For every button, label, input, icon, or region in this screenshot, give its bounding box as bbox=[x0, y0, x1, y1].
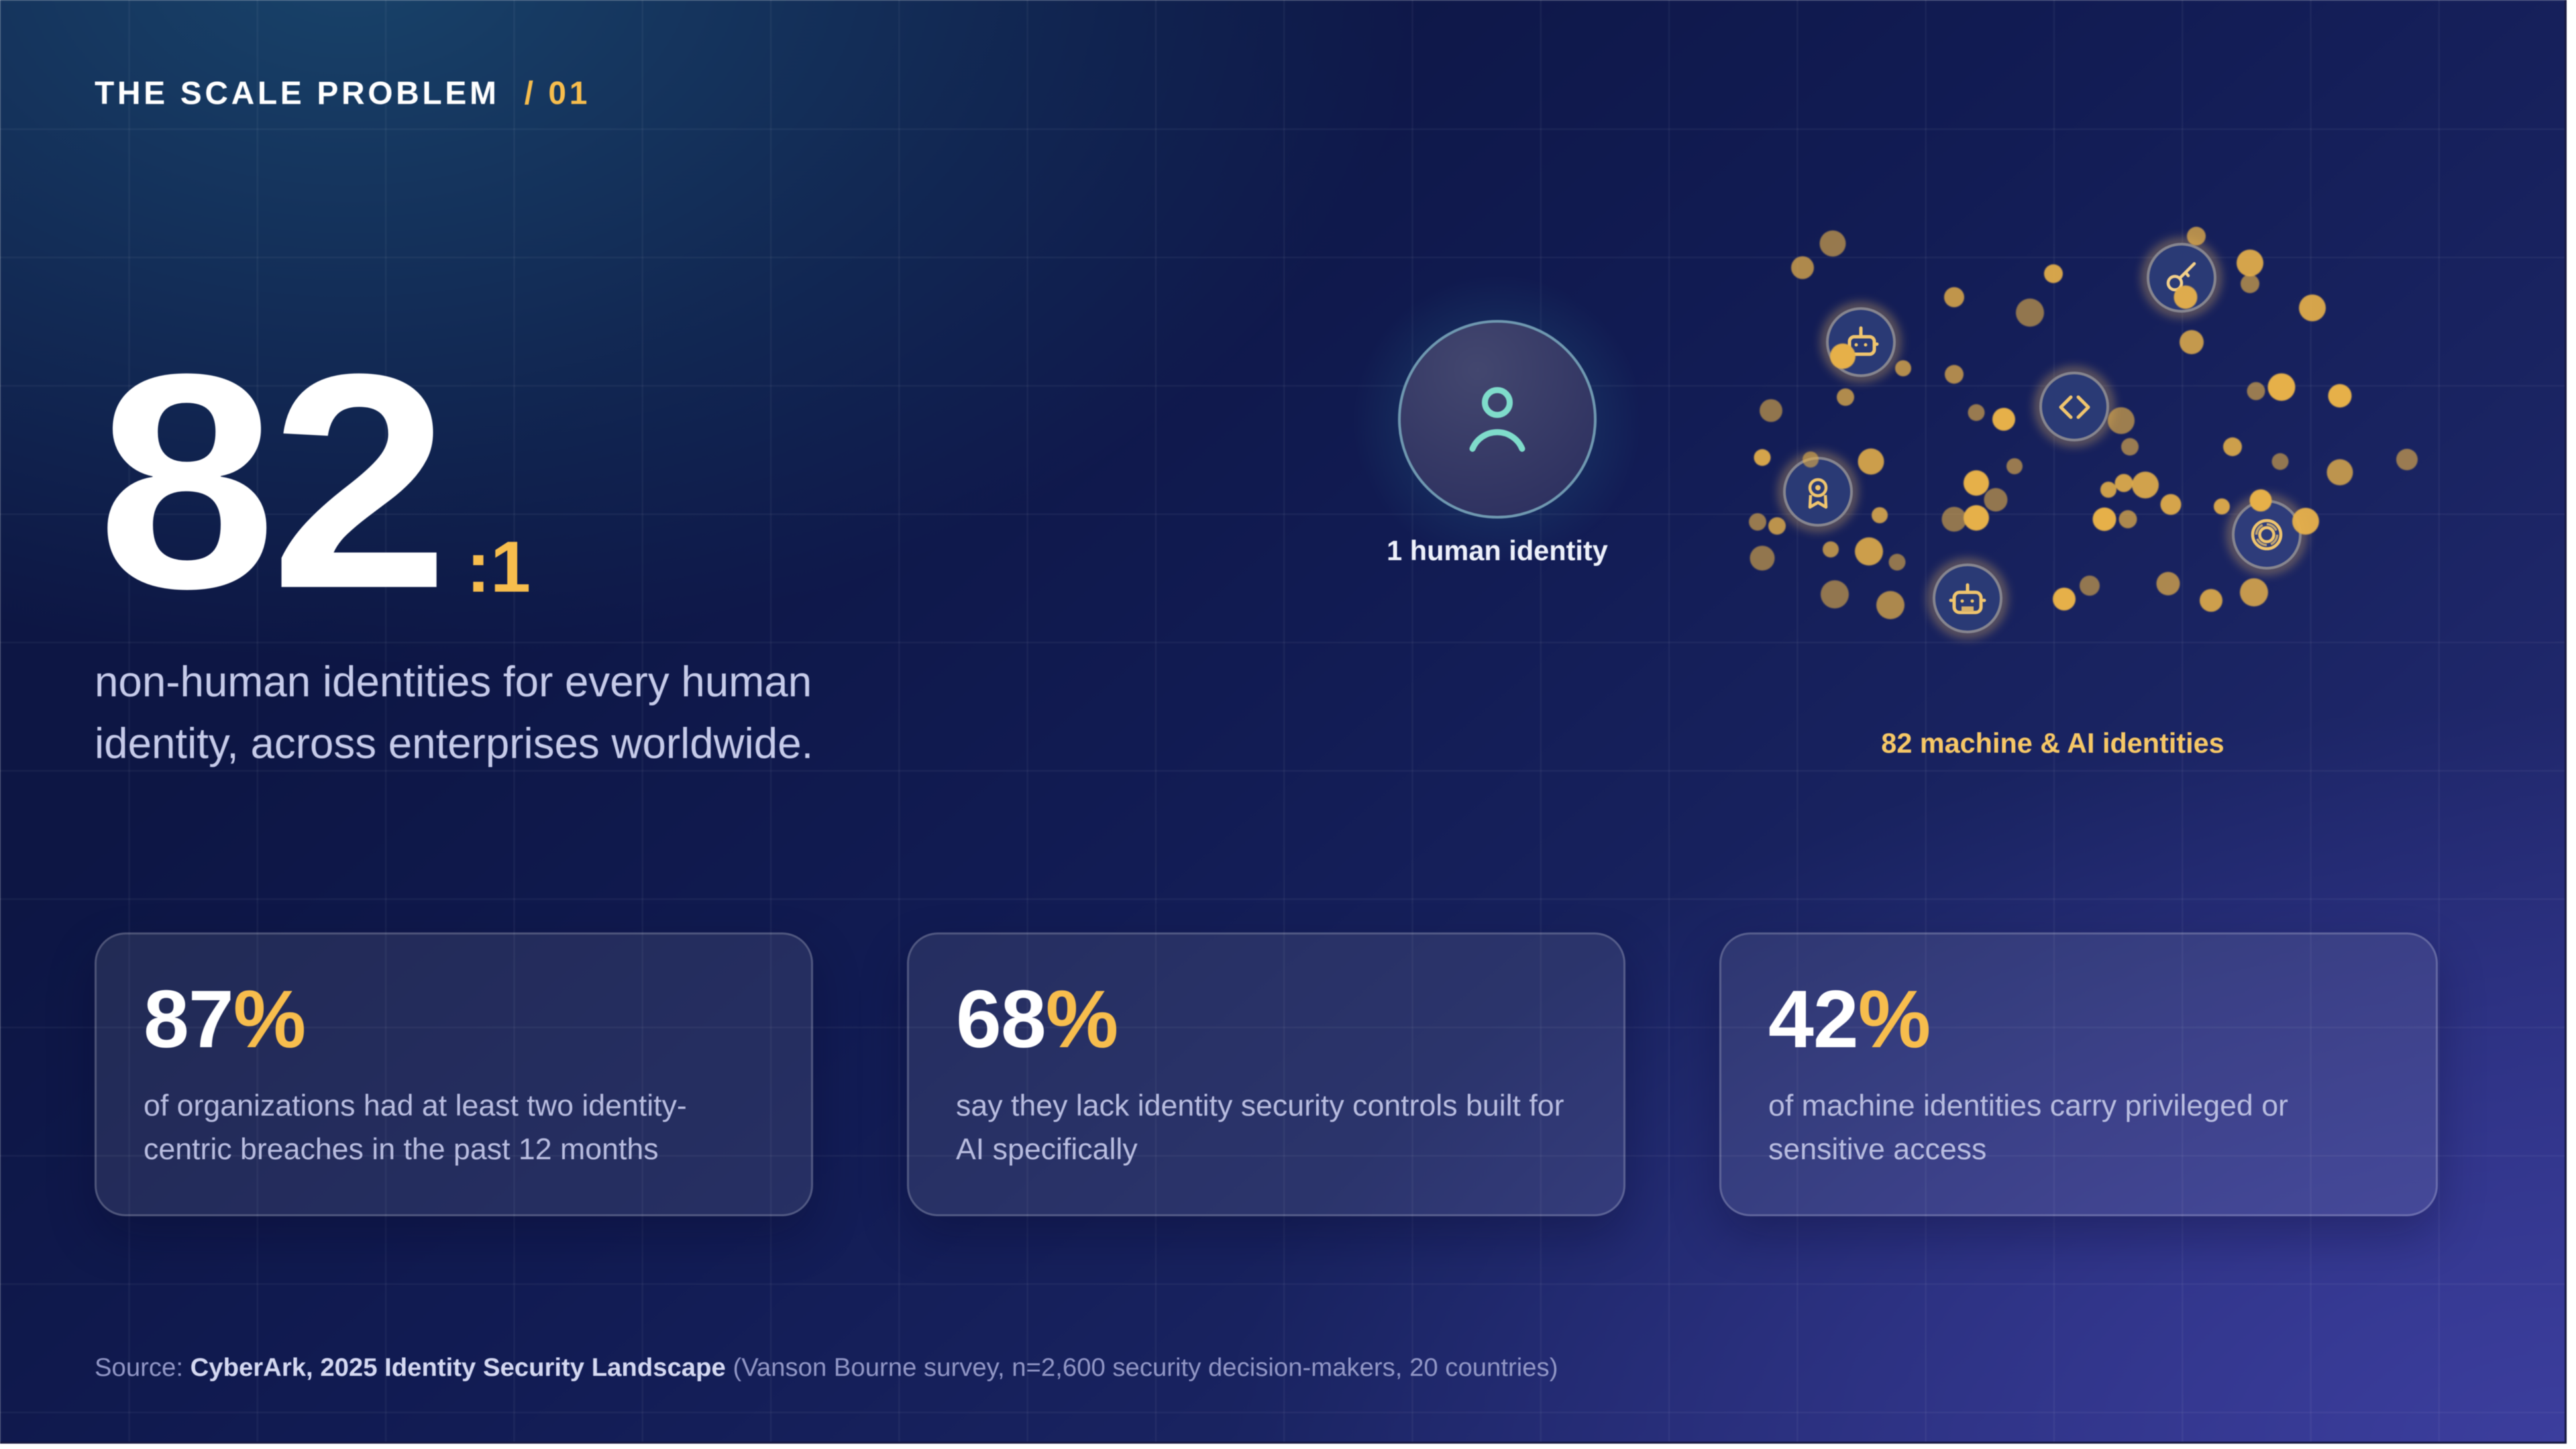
stat value: 68% bbox=[956, 973, 1118, 1065]
icon: key bbox=[2147, 243, 2216, 313]
stat description: of machine identities carry privileged or bbox=[1768, 1089, 2288, 1122]
big ratio number: :1 bbox=[466, 526, 531, 607]
source line: Source: CyberArk, 2025 Identity Security Landscape (Vanson Bourne survey, n=2,600 security decision-makers, 20 countries) bbox=[95, 1353, 1558, 1382]
stat description: of organizations had at least two identity- bbox=[144, 1089, 687, 1122]
icon: robot bbox=[1826, 307, 1896, 377]
icon: robot bbox=[1933, 564, 2002, 633]
stat value: 42% bbox=[1768, 973, 1930, 1065]
stat description bbox=[1768, 1089, 2288, 1166]
stat value: 87% bbox=[144, 973, 305, 1065]
icon: target ring bbox=[2232, 500, 2302, 570]
stat description: say they lack identity security controls built for bbox=[956, 1089, 1564, 1122]
section header: THE SCALE PROBLEM / 01 bbox=[95, 76, 590, 111]
stat card: 87% bbox=[95, 932, 813, 1216]
icon: person bbox=[1472, 390, 1522, 449]
stat description bbox=[955, 1089, 1564, 1166]
stat description: sensitive access bbox=[1768, 1132, 1986, 1166]
icon: code bbox=[2039, 372, 2109, 441]
stat description bbox=[144, 1089, 687, 1166]
stat description: centric breaches in the past 12 months bbox=[144, 1132, 659, 1166]
stat description: AI specifically bbox=[956, 1132, 1138, 1166]
machine label: 82 machine & AI identities bbox=[1881, 728, 2224, 759]
stat card: 42% bbox=[1719, 932, 2438, 1216]
machine identity cluster bbox=[1749, 227, 2418, 633]
stat card: 68% bbox=[907, 932, 1625, 1216]
human identity node bbox=[1353, 275, 1642, 564]
big ratio number: 82 bbox=[97, 310, 443, 652]
ratio description: non-human identities for every human bbox=[95, 658, 812, 706]
ratio description: identity, across enterprises worldwide. bbox=[95, 720, 813, 767]
human label: 1 human identity bbox=[1387, 535, 1608, 566]
icon: award bbox=[1783, 457, 1853, 527]
identity dots bbox=[1749, 227, 2418, 619]
ratio description bbox=[95, 658, 813, 767]
